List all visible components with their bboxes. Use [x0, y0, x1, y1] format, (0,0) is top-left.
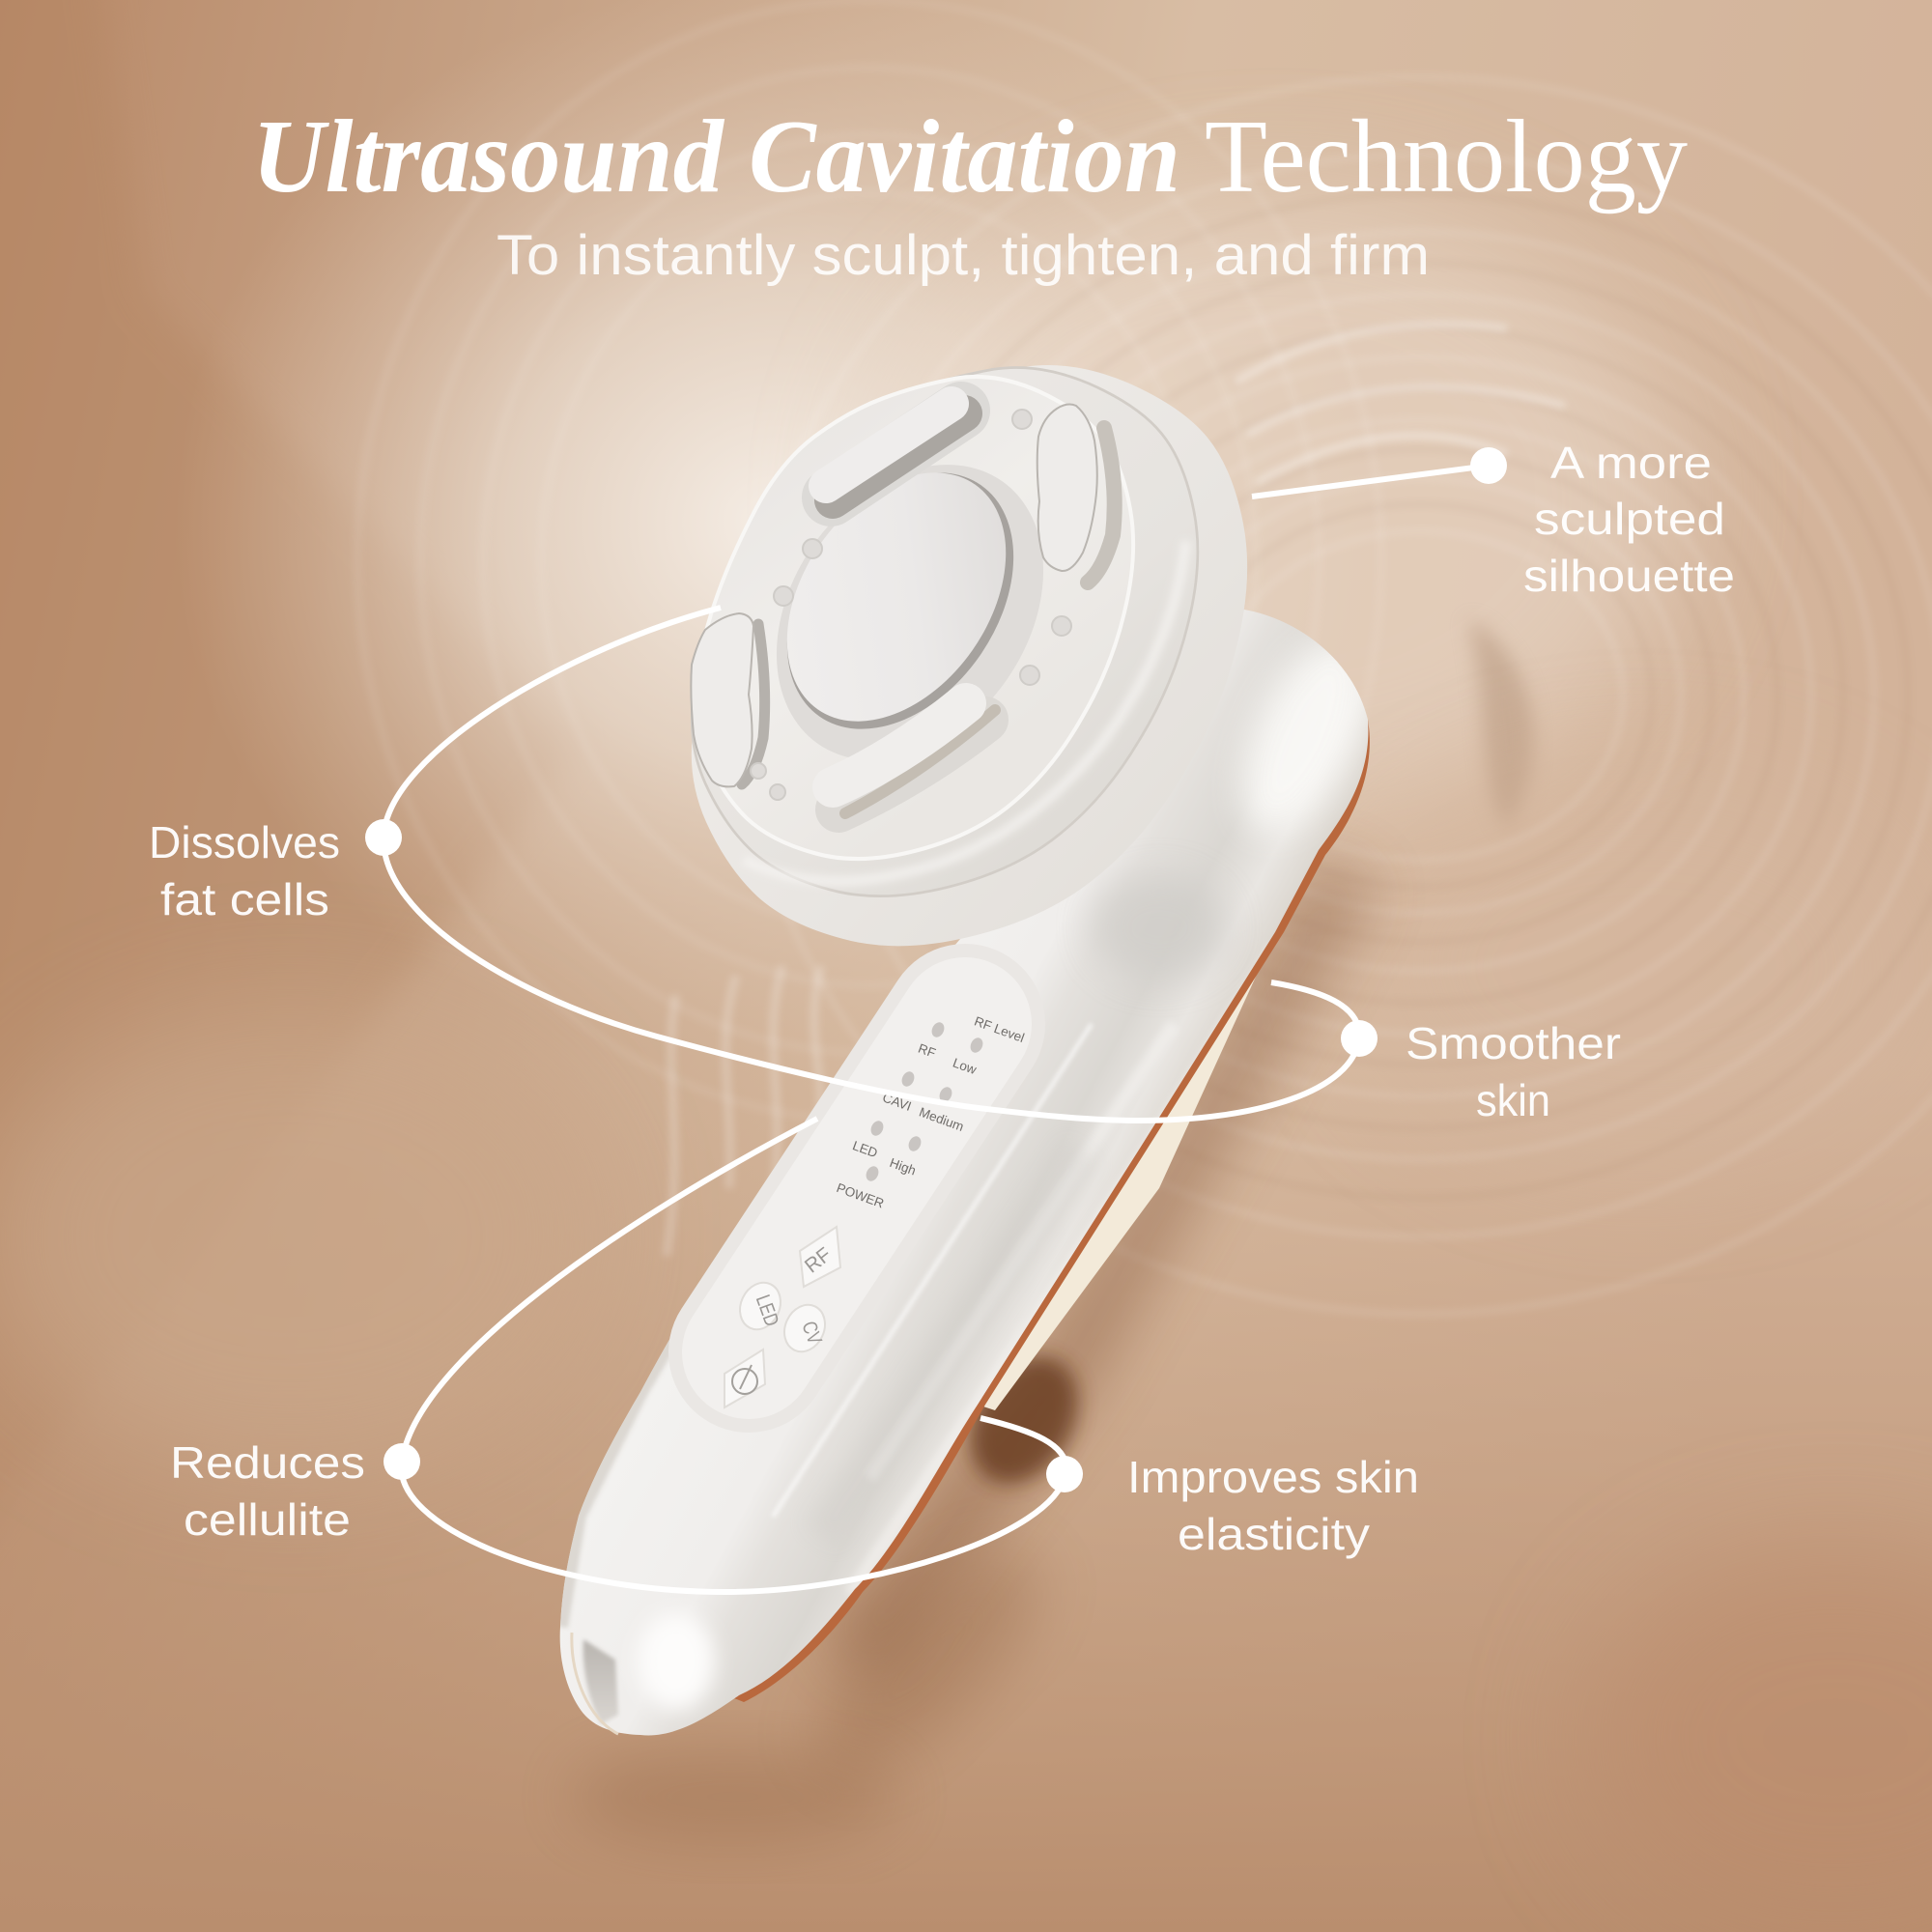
callout: a more sculpted silhouette: silhouette	[1523, 551, 1735, 601]
device: handheld ultrasound wand	[560, 365, 1393, 1736]
indicator labels: Medium	[917, 1105, 966, 1134]
indicator labels: Low	[951, 1055, 979, 1077]
silver electrode: left	[691, 613, 765, 786]
callout: reduces cellulite and improves skin elasticity orbit	[170, 1119, 1419, 1592]
callout: a more sculpted silhouette: A more	[1550, 438, 1712, 488]
callout: reduces cellulite and improves skin elasticity orbit: Reduces	[170, 1437, 365, 1488]
cream side shell	[978, 966, 1261, 1410]
callout: reduces cellulite and improves skin elasticity orbit: elasticity	[1178, 1509, 1370, 1559]
control panel: CV	[797, 1319, 826, 1348]
copper side edge of the handle	[715, 720, 1370, 1702]
indicator labels: LED	[851, 1138, 880, 1160]
silver electrode: right	[1037, 405, 1115, 582]
title	[252, 99, 1688, 214]
callout: reduces cellulite and improves skin elasticity orbit: Improves skin	[1127, 1452, 1419, 1502]
indicator labels: RF	[917, 1041, 938, 1061]
callout: dissolves fat cells and smoother skin orbit: Dissolves	[149, 817, 340, 867]
central silver pad	[742, 432, 1051, 762]
silver electrode: bottom	[833, 703, 995, 813]
subtitle: To instantly sculpt, tighten, and firm	[497, 224, 1430, 287]
title: Ultrasound Cavitation	[252, 99, 1180, 214]
icon: power symbol	[732, 1365, 757, 1394]
control panel: LED	[751, 1293, 782, 1329]
indicator lights	[864, 1020, 985, 1183]
head: frosted band	[692, 367, 1198, 896]
callout: a more sculpted silhouette: sculpted	[1534, 494, 1725, 544]
LED dots	[751, 410, 1071, 800]
title: Technology	[1205, 99, 1688, 214]
indicator labels: POWER	[835, 1180, 886, 1211]
indicator labels: CAVI	[881, 1091, 913, 1114]
control panel: RF	[801, 1243, 836, 1278]
head: outer dome	[692, 365, 1247, 946]
silver electrode: top left	[826, 404, 964, 500]
callout: reduces cellulite and improves skin elasticity orbit: cellulite	[184, 1494, 351, 1545]
handle body	[560, 610, 1368, 1736]
tip notch	[572, 1633, 618, 1734]
callout: dissolves fat cells and smoother skin orbit: skin	[1476, 1075, 1550, 1125]
head: translucent face plate	[691, 377, 1133, 859]
device shadow on the surface	[570, 869, 1348, 1845]
callout: dissolves fat cells and smoother skin orbit: fat cells	[160, 874, 329, 924]
buttons	[724, 1227, 840, 1407]
control panel	[724, 1013, 1026, 1407]
callout: dissolves fat cells and smoother skin orbit	[149, 608, 1621, 1125]
indicator labels: RF Level	[973, 1013, 1026, 1045]
handle shading and facets	[560, 617, 1393, 1710]
indicator labels: High	[888, 1155, 918, 1179]
indicator labels	[835, 1013, 1026, 1211]
callout: dissolves fat cells and smoother skin orbit: Smoother	[1406, 1018, 1621, 1068]
central silver ring	[722, 413, 1098, 811]
callout: a more sculpted silhouette	[1252, 438, 1735, 601]
